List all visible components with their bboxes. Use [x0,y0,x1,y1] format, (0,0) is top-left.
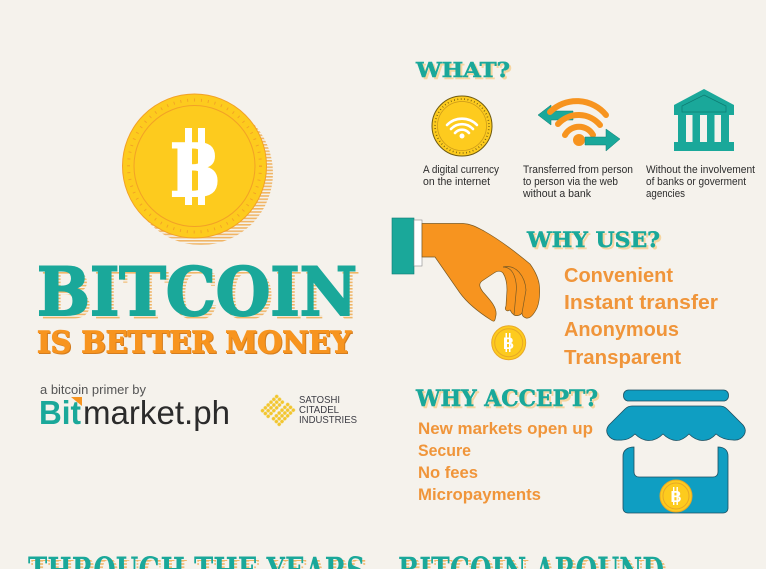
list: why accept [418,419,593,504]
heading: WHY USE?: WHY USE? [528,229,662,254]
icon: digital coin with wifi [432,96,492,156]
large bitcoin coin [122,94,273,245]
icon: hand dropping coin [392,218,540,321]
list: why use: Convenient [564,265,673,287]
icon: coin on stall [660,480,692,512]
caption: transferred person to person: Transferred from person [523,164,633,176]
heading: WHY ACCEPT?: WHY ACCEPT? [417,388,600,414]
caption: digital currency: A digital currency [423,164,499,176]
logo: Satoshi Citadel Industries: SATOSHI [299,394,340,406]
caption: no banks [646,164,755,200]
list: why use: Anonymous [564,319,679,341]
list: why accept: Micropayments [418,485,541,504]
caption: no banks: Without the involvement [646,164,755,176]
icon: coin below hand [492,326,526,360]
heading: WHY USE?: WHY USE? [526,227,660,252]
logo: Satoshi Citadel Industries: INDUSTRIES [299,414,357,426]
title: BITCOIN: BITCOIN [40,257,361,335]
list: why use [564,265,718,369]
icon: market stall [607,390,745,513]
list: why accept: Secure [418,441,471,460]
caption: digital currency [423,164,499,188]
list: why use: Transparent [564,347,681,369]
logo: Bitmarket.ph: Bit [39,394,81,431]
icon: bank [674,89,734,151]
heading: WHAT?: WHAT? [415,58,510,82]
caption: transferred person to person [522,164,633,200]
subtitle: is better money: IS BETTER MONEY [38,326,353,362]
logo: Satoshi Citadel Industries [260,394,357,427]
heading: WHY ACCEPT?: WHY ACCEPT? [415,386,598,412]
icon: coin on stall: B [670,489,682,506]
list: why use: Instant transfer [564,292,718,314]
large bitcoin coin: B [170,128,220,213]
icon: wifi with transfer arrows [538,101,620,151]
caption: no banks: of banks or goverment [646,176,746,188]
logo: Bitmarket.ph: market.ph [83,394,230,431]
list: why accept: No fees [418,463,478,482]
icon: coin below hand: B [503,334,514,353]
logo: Satoshi Citadel Industries: CITADEL [299,404,339,416]
caption: transferred person to person: without a bank [522,188,591,200]
caption: digital currency: on the internet [423,176,490,188]
credit line: a bitcoin primer by [40,382,146,397]
heading: WHAT?: WHAT? [417,60,512,84]
caption: transferred person to person: to person via the web [523,176,618,188]
list: why accept: New markets open up [418,419,593,438]
title: BITCOIN: BITCOIN [37,253,357,331]
caption: no banks: agencies [646,188,685,200]
subtitle: is better money: IS BETTER MONEY [37,326,352,360]
